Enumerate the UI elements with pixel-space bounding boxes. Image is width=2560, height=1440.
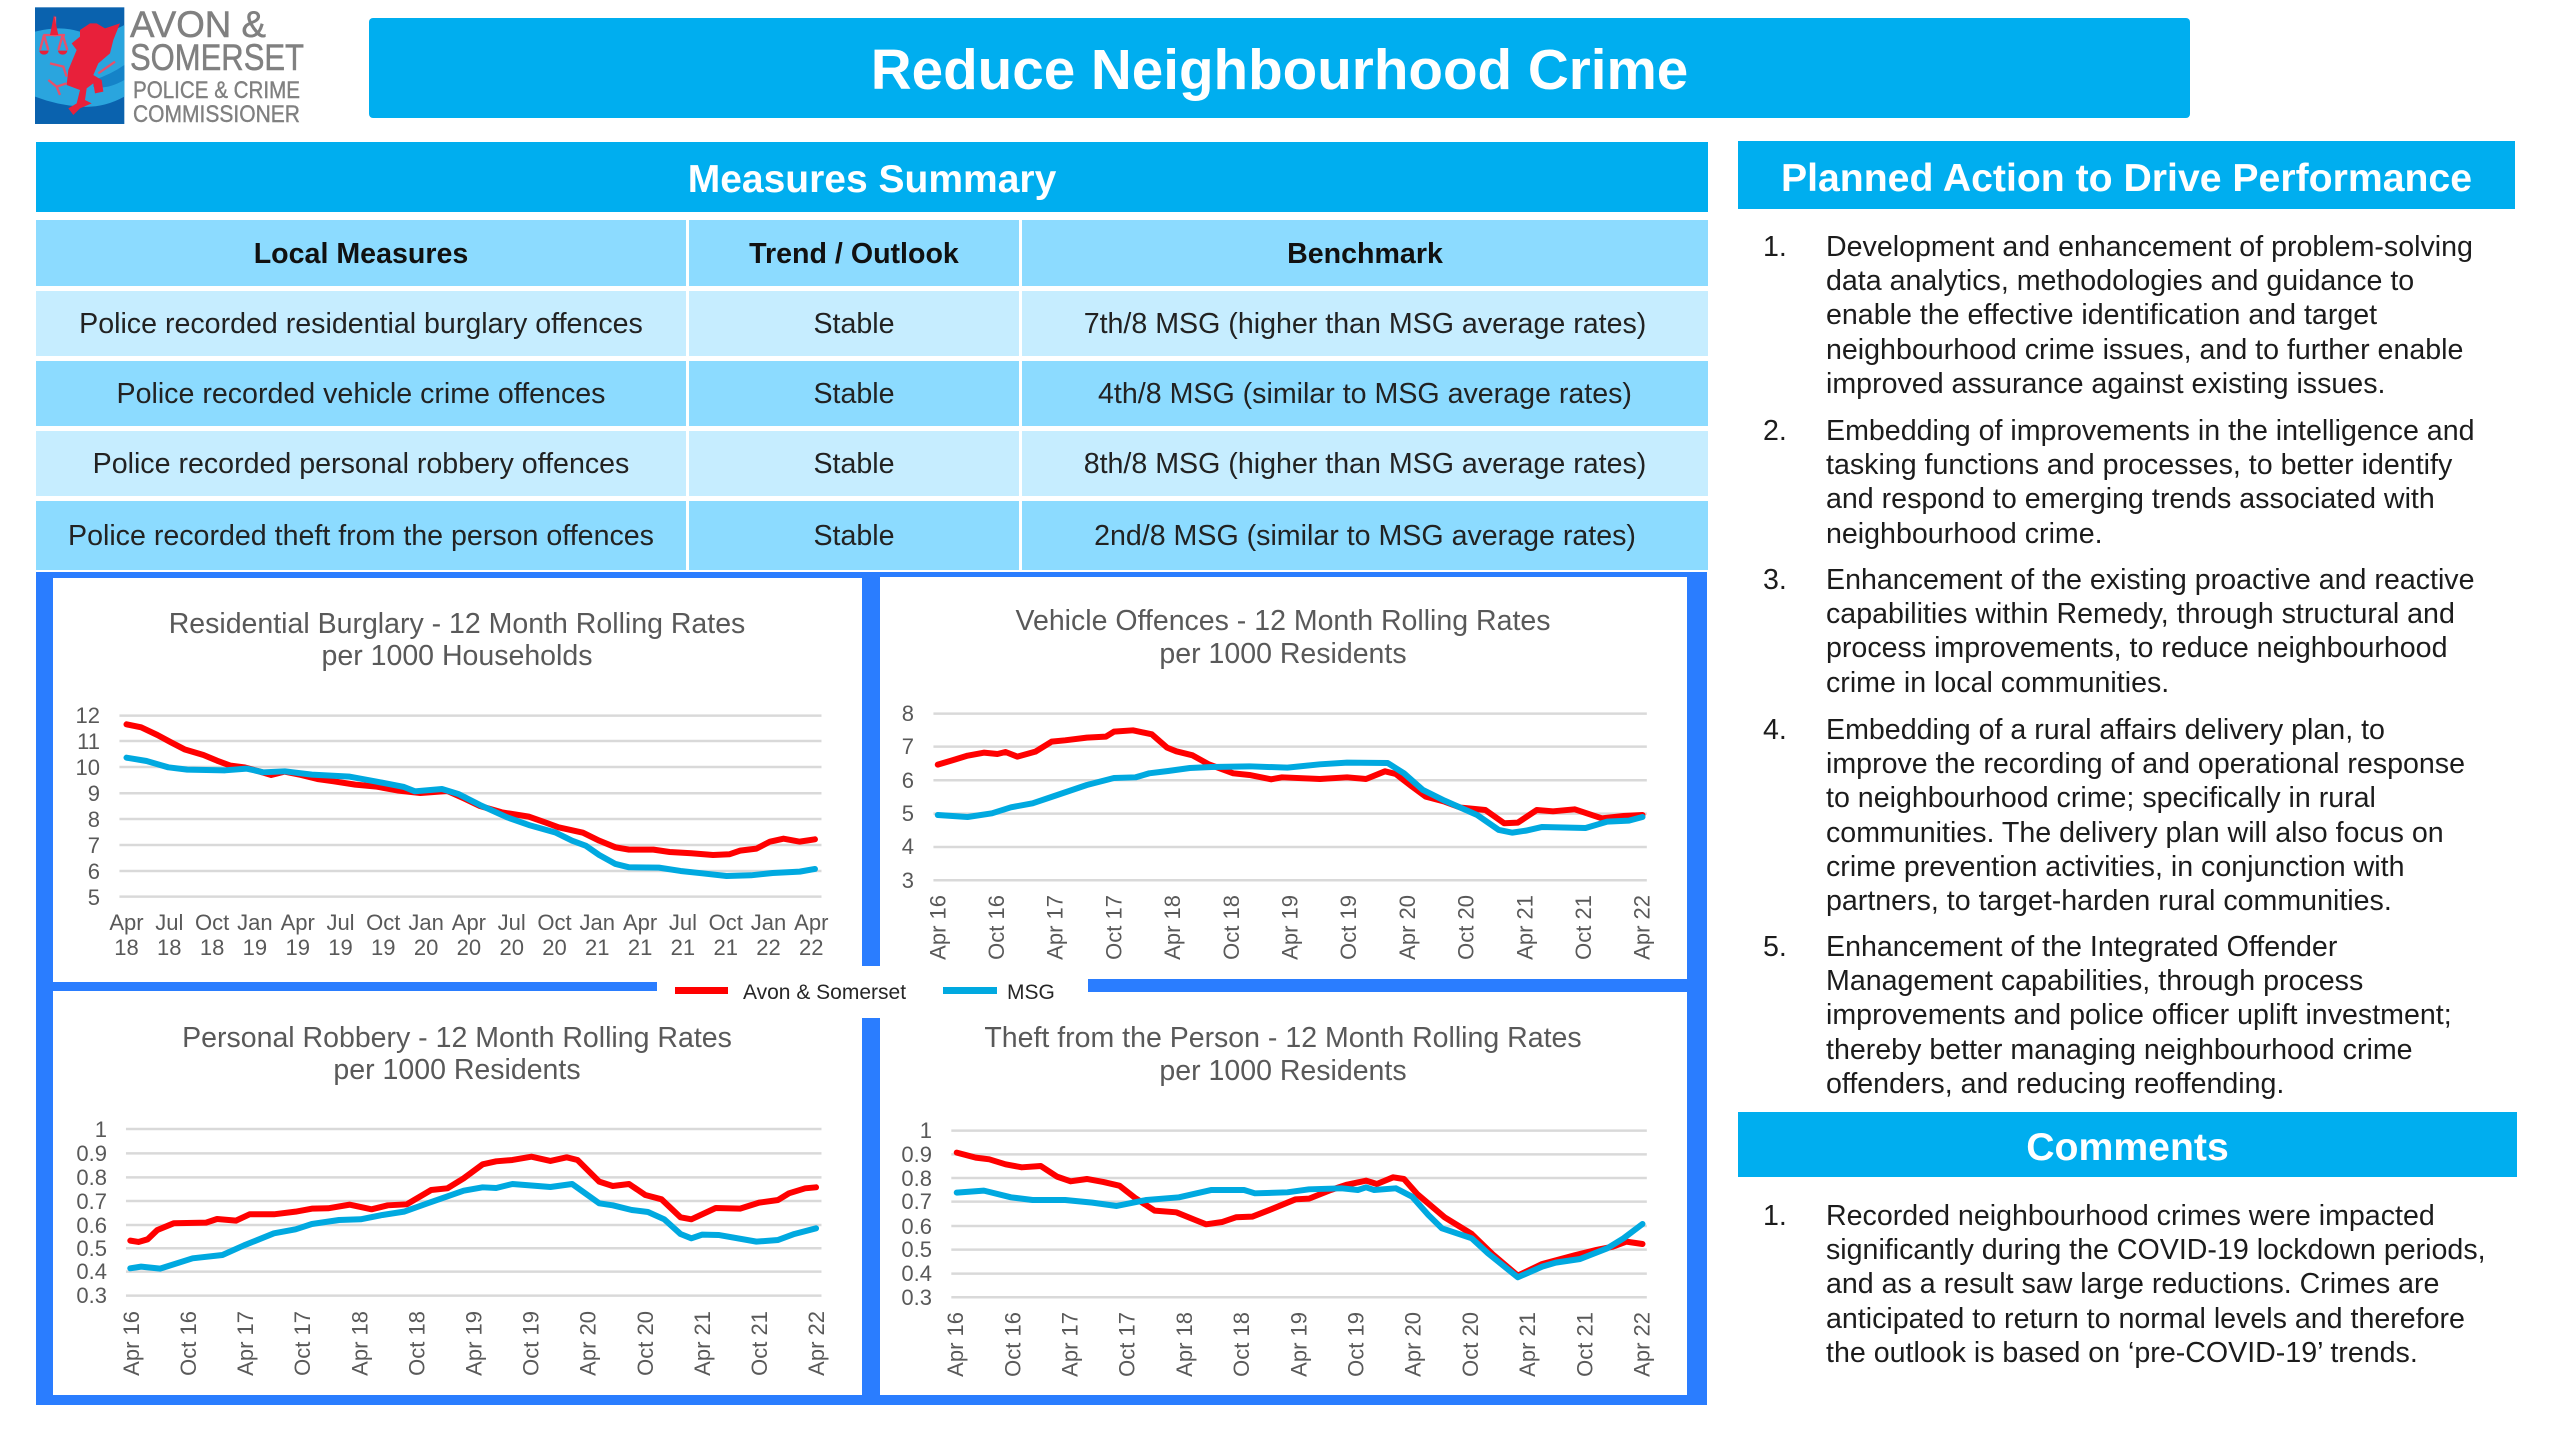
chart: residential burglary: 9 [88,781,100,806]
text block: action list: Development and enhancement of problem-solving [1826,231,2473,263]
text block: action list: and respond to emerging trends associated with [1826,483,2435,515]
panel: charts frame [36,572,1707,1405]
chart: personal robbery [53,991,862,1395]
chart: residential burglary: Jan [580,910,615,935]
chart: residential burglary: per 1000 Households [322,640,592,672]
chart: vehicle offences: 4 [902,834,914,859]
table: local measures summary: Stable [813,308,895,340]
chart: vehicle offences: Apr 22 [1630,895,1655,960]
chart: residential burglary: Jan [408,910,444,935]
chart: personal robbery: Apr 18 [347,1311,372,1376]
chart: theft from the person: Oct 17 [1115,1312,1140,1377]
chart: personal robbery: Personal Robbery - 12 Month Rolling Rates [182,1022,732,1054]
text block: action list: 4. [1763,714,1787,746]
text block: comments: Recorded neighbourhood crimes were impacted [1826,1200,2435,1232]
chart: residential burglary: 11 [77,729,100,754]
text block: action list: data analytics, methodologies and guidance to [1826,265,2414,297]
chart: residential burglary: 7 [88,833,100,858]
text block: action list: improve the recording of and operational response [1826,748,2465,780]
chart: personal robbery: Apr 16 [119,1311,144,1376]
table: local measures summary: 2nd/8 MSG (similar to MSG average rates) [1094,520,1636,552]
text block: action list: Management capabilities, through process [1826,965,2363,997]
chart: residential burglary: 10 [76,755,100,780]
legend: Avon & Somerset [743,981,906,1004]
chart: residential burglary: 20 [457,935,481,960]
chart: residential burglary: 21 [713,935,738,960]
text block: action list: improved assurance against existing issues. [1826,368,2385,400]
chart: theft from the person: 1 [920,1118,932,1143]
chart: residential burglary: Jul [498,910,526,935]
chart: vehicle offences: Apr 21 [1512,895,1537,960]
text block: action list: Enhancement of the Integrated Offender [1826,931,2337,963]
chart: personal robbery: 0.4 [76,1259,107,1284]
chart: vehicle offences: Apr 17 [1043,895,1068,960]
chart: theft from the person: 0.3 [901,1285,932,1310]
chart: vehicle offences: Apr 19 [1278,895,1302,960]
text block: action list: 1. [1763,231,1787,263]
chart: residential burglary: Apr [452,910,486,935]
table: local measures summary: Stable [813,520,895,552]
chart: theft from the person: Apr 22 [1630,1312,1654,1377]
chart: residential burglary: 20 [414,935,438,960]
chart: residential burglary: Residential Burglary - 12 Month Rolling Rates [169,608,745,640]
text block: action list: tasking functions and processes, to better identify [1826,449,2452,481]
chart: residential burglary: 19 [285,935,310,960]
text block: action list: neighbourhood crime. [1826,518,2103,550]
chart: personal robbery: 0.6 [76,1213,107,1238]
chart: residential burglary: Oct [195,910,229,935]
chart: vehicle offences: Oct 21 [1571,895,1596,960]
text block: comments: the outlook is based on ‘pre-COVID-19’ trends. [1826,1337,2418,1369]
table: local measures summary [36,220,1708,570]
chart: vehicle offences: Oct 16 [984,895,1009,960]
chart: residential burglary: Apr [623,910,657,935]
chart: personal robbery: Apr 22 [804,1311,829,1376]
text block: comments: significantly during the COVID-19 lockdown periods, [1826,1234,2486,1266]
chart: residential burglary: 20 [499,935,524,960]
chart: residential burglary: 21 [585,935,610,960]
text block: action list: Enhancement of the existing proactive and reactive [1826,564,2475,596]
chart: residential burglary: 18 [200,935,224,960]
chart: theft from the person: Oct 21 [1572,1312,1597,1377]
heading: measures summary: Measures Summary [688,158,1056,200]
chart: residential burglary: Jul [326,910,355,935]
text block: action list: communities. The delivery plan will also focus on [1826,817,2444,849]
text block: action list: thereby better managing neighbourhood crime [1826,1034,2413,1066]
chart: vehicle offences: Oct 17 [1101,895,1126,960]
text block: comments: and as a result saw large reductions. Crimes are [1826,1268,2439,1300]
chart: residential burglary: 5 [88,885,100,910]
chart: theft from the person: Apr 21 [1515,1312,1540,1377]
title banner: Reduce Neighbourhood Crime [871,38,1688,100]
text block: action list: improvements and police officer uplift investment; [1826,999,2452,1031]
chart: theft from the person [880,992,1687,1395]
legend [657,966,1088,1018]
chart: personal robbery: Oct 20 [633,1311,658,1376]
chart: vehicle offences: Apr 16 [925,895,950,960]
chart: theft from the person: Oct 18 [1229,1312,1254,1377]
chart: theft from the person: Theft from the Person - 12 Month Rolling Rates [984,1022,1582,1054]
chart: vehicle offences [880,577,1687,979]
chart: theft from the person: Oct 16 [1000,1312,1025,1377]
table: local measures summary: Local Measures [254,238,468,270]
chart: residential burglary: Jul [155,910,183,935]
chart: personal robbery: Apr 19 [462,1311,486,1376]
chart: residential burglary: 18 [157,935,182,960]
chart: vehicle offences: 7 [902,734,914,759]
chart: theft from the person: 0.7 [901,1189,932,1214]
chart: residential burglary: Apr [794,910,828,935]
chart: residential burglary: 6 [88,859,100,884]
table: local measures summary: Police recorded residential burglary offences [79,308,643,340]
chart: personal robbery: Oct 18 [404,1311,429,1376]
logo: Avon & Somerset Police & Crime Commissioner: AVON & [130,4,266,45]
chart: vehicle offences: Oct 18 [1219,895,1244,960]
chart: theft from the person: 0.6 [901,1214,932,1239]
chart: theft from the person: Apr 19 [1286,1312,1311,1377]
chart: theft from the person: per 1000 Residents [1159,1055,1407,1087]
text block: comments: anticipated to return to normal levels and therefore [1826,1303,2465,1335]
heading: comments: Comments [2026,1126,2229,1169]
chart: personal robbery: Oct 19 [519,1311,544,1376]
chart: vehicle offences: 6 [902,768,914,793]
table: local measures summary: 7th/8 MSG (higher than MSG average rates) [1084,308,1646,340]
text block: action list: Embedding of improvements in the intelligence and [1826,415,2475,447]
chart: residential burglary: Oct [537,910,572,935]
text block: action list: process improvements, to reduce neighbourhood [1826,632,2447,664]
table: local measures summary: Trend / Outlook [749,238,959,270]
chart: residential burglary: 22 [799,935,824,960]
table: local measures summary: Police recorded personal robbery offences [93,448,629,480]
heading: planned action: Planned Action to Drive Performance [1781,156,2472,200]
table: local measures summary: Police recorded theft from the person offences [68,520,654,552]
chart: residential burglary: 20 [542,935,567,960]
logo: Avon & Somerset Police & Crime Commissioner [35,4,304,128]
chart: personal robbery: Oct 17 [290,1311,315,1376]
table: local measures summary: Police recorded vehicle crime offences [116,378,605,410]
chart: personal robbery: Apr 21 [690,1311,715,1376]
text block: action list: Embedding of a rural affairs delivery plan, to [1826,714,2385,746]
chart: residential burglary: 8 [88,807,100,832]
chart: theft from the person: Apr 17 [1058,1312,1082,1377]
chart: vehicle offences: 5 [902,801,914,826]
chart: personal robbery: 0.5 [76,1236,107,1261]
chart: residential burglary: Jul [669,910,697,935]
chart: theft from the person: 0.8 [901,1166,932,1191]
chart: residential burglary: Apr [281,910,315,935]
chart: residential burglary: Oct [709,910,743,935]
chart: personal robbery: Oct 21 [747,1311,772,1376]
chart: residential burglary: 21 [628,935,652,960]
chart: residential burglary: 22 [756,935,781,960]
chart: residential burglary: 18 [114,935,139,960]
chart: theft from the person: Oct 20 [1458,1312,1483,1377]
heading: planned action [1738,141,2515,209]
table: local measures summary: Stable [813,448,895,480]
text block: action list: capabilities within Remedy, through structural and [1826,598,2455,630]
chart: vehicle offences: 8 [902,701,914,726]
text block: comments: 1. [1763,1200,1787,1232]
chart: vehicle offences: Oct 20 [1454,895,1479,960]
chart: theft from the person: Apr 20 [1401,1312,1426,1377]
chart: vehicle offences: 3 [902,868,914,893]
chart: residential burglary: 21 [671,935,695,960]
chart: residential burglary: 12 [76,703,100,728]
chart: residential burglary: Apr [109,910,144,935]
text block: action list [1763,231,2475,1100]
table: local measures summary: 4th/8 MSG (similar to MSG average rates) [1098,378,1632,410]
table: local measures summary: Benchmark [1287,238,1443,270]
chart: theft from the person: Apr 16 [943,1312,968,1377]
chart: vehicle offences: Vehicle Offences - 12 Month Rolling Rates [1016,605,1550,637]
text block: action list: to neighbourhood crime; specifically in rural [1826,782,2376,814]
chart: residential burglary [53,578,862,982]
chart: residential burglary: 19 [328,935,353,960]
chart: residential burglary: 19 [243,935,267,960]
chart: personal robbery: 0.9 [76,1141,107,1166]
chart: theft from the person: 0.9 [901,1142,932,1167]
text block: action list: crime in local communities. [1826,667,2169,699]
chart: personal robbery: Apr 17 [233,1311,258,1376]
chart: vehicle offences: Apr 20 [1395,895,1420,960]
legend: MSG [1007,981,1055,1004]
chart: vehicle offences: Apr 18 [1160,895,1185,960]
chart: residential burglary: Oct [366,910,400,935]
chart: personal robbery: 0.7 [76,1189,107,1214]
title banner [369,18,2190,118]
chart: theft from the person: 0.5 [901,1237,932,1262]
chart: personal robbery: per 1000 Residents [333,1054,581,1086]
text block: action list: 2. [1763,415,1787,447]
text block: action list: enable the effective identification and target [1826,299,2377,331]
table: local measures summary: 8th/8 MSG (higher than MSG average rates) [1084,448,1646,480]
heading: measures summary [36,142,1708,212]
text block: action list: crime prevention activities, in conjunction with [1826,851,2404,883]
text block: comments [1763,1200,2486,1369]
chart: personal robbery: Apr 20 [576,1311,601,1376]
text block: action list: offenders, and reducing reoffending. [1826,1068,2284,1100]
chart: vehicle offences: per 1000 Residents [1159,638,1407,670]
chart: theft from the person: Oct 19 [1344,1312,1368,1377]
table: local measures summary: Stable [813,378,895,410]
text block: action list: 3. [1763,564,1787,596]
chart: residential burglary: Jan [237,910,273,935]
chart: residential burglary: Jan [751,910,786,935]
chart: personal robbery: 1 [95,1117,107,1142]
heading: comments [1738,1112,2517,1177]
chart: theft from the person: 0.4 [901,1261,932,1286]
chart: personal robbery: 0.8 [76,1165,107,1190]
chart: vehicle offences: Oct 19 [1336,895,1361,960]
chart: personal robbery: Oct 16 [176,1311,201,1376]
text block: action list: partners, to target-harden rural communities. [1826,885,2392,917]
chart: theft from the person: Apr 18 [1172,1312,1197,1377]
chart: personal robbery: 0.3 [76,1283,107,1308]
text block: action list: 5. [1763,931,1787,963]
text block: action list: neighbourhood crime issues, and to further enable [1826,334,2463,366]
chart: residential burglary: 19 [371,935,396,960]
